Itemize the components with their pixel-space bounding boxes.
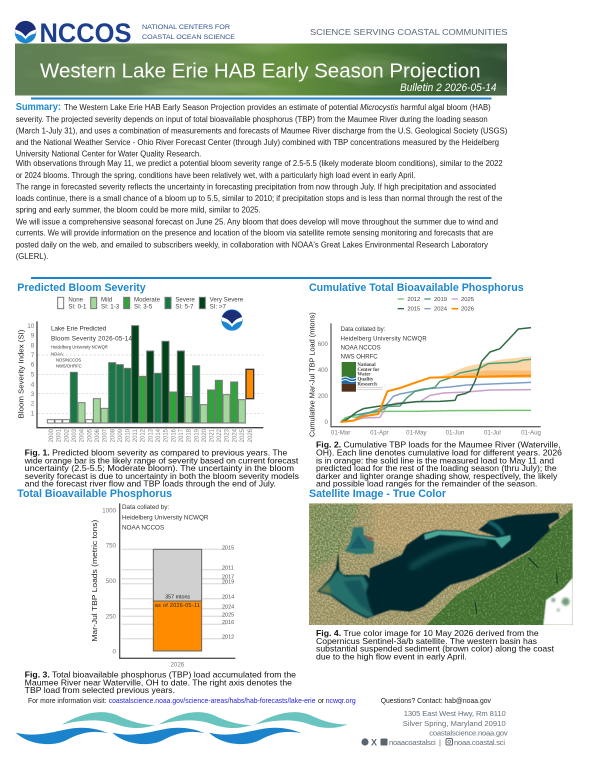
legend: SI: 3-5 bbox=[134, 304, 153, 311]
year labels: 2019 bbox=[222, 580, 234, 586]
bars bbox=[47, 326, 254, 423]
year labels: 2020 bbox=[202, 428, 208, 442]
year labels: 2004 bbox=[80, 428, 86, 442]
load lines bbox=[341, 328, 531, 422]
year labels: 2010 bbox=[126, 428, 132, 442]
caption: figure 3: TBP load from selected previous years. bbox=[25, 686, 175, 695]
summary text: currents. We will provide information on the presence and location of the bloom via satellite remote sensing monitoring and forecasts that are bbox=[16, 229, 494, 238]
summary text: (March 1-July 31), and uses a combination of measurements and forecasts of Maumee River discharge from the U.S. Geological Society (USGS) bbox=[16, 126, 508, 135]
caption: figure 2: predicted load for the rest of the loading season (thru July); the bbox=[316, 464, 557, 473]
NCCOS wordmark: NCCOS bbox=[40, 18, 132, 48]
caption: figure 4: Fig. 4. True color image for 10 May 2026 derived from the bbox=[316, 629, 539, 638]
caption: figure 2: darker and lighter orange shading show, respectively, the likely bbox=[316, 472, 558, 481]
summary text: spring and early summer, the bloom could be more mild, similar to 2025. bbox=[16, 206, 261, 215]
year labels: 2016 bbox=[171, 428, 177, 442]
data credits: NOAA NCCOS bbox=[122, 525, 164, 532]
axis labels: 0 bbox=[325, 419, 329, 426]
organisation name: COASTAL OCEAN SCIENCE bbox=[142, 34, 236, 41]
summary text: Summary: bbox=[16, 102, 61, 113]
caption: figure 1 bbox=[24, 449, 299, 489]
axis labels: 01-Jul bbox=[484, 430, 501, 437]
caption: figure 4 bbox=[316, 629, 555, 661]
summary text: severity. The projected severity depends on input of total bioavailable phosphorus (TBP) from the Maumee River during the loading season bbox=[16, 115, 488, 124]
axis labels: 01-Mar bbox=[331, 430, 350, 437]
caption: figure 4: substantial suspended sediment (brown color) along the coast bbox=[316, 645, 555, 654]
year labels: 2007 bbox=[103, 428, 109, 442]
caption: figure 3 bbox=[25, 671, 297, 695]
more information line bbox=[28, 697, 356, 705]
y axis labels bbox=[27, 323, 35, 418]
year labels: 2021 bbox=[209, 428, 215, 442]
data credits: Data collated by: bbox=[341, 327, 386, 333]
icon: water quality research logo: Quality bbox=[357, 377, 374, 382]
bar chart: bloom severity bbox=[18, 297, 263, 442]
chart annotation: Heidelberg University NCWQR bbox=[51, 344, 108, 349]
year labels: 2002 bbox=[64, 428, 70, 442]
chart annotation: Bloom Severity 2026-05-14 bbox=[51, 335, 132, 342]
legend: None bbox=[68, 297, 84, 304]
address block: noaa.coastal.sci bbox=[454, 738, 505, 747]
bar labels bbox=[155, 594, 200, 609]
y axis title: Mar-Jul TBP Loads (metric tons) bbox=[90, 519, 99, 642]
year labels bbox=[222, 545, 234, 640]
legend: Moderate bbox=[134, 297, 161, 304]
year labels: 2019 bbox=[194, 428, 200, 442]
address block: | bbox=[439, 738, 441, 747]
year labels: 2009 bbox=[118, 428, 124, 442]
data credits: Heidelberg University NCWQR bbox=[122, 514, 209, 521]
axis labels bbox=[102, 507, 185, 669]
y axis labels: 6 bbox=[31, 362, 35, 369]
year labels: 2025 bbox=[240, 428, 246, 442]
axis labels: 01-May bbox=[406, 430, 428, 437]
summary text: and the National Weather Service - Ohio River Forecast Center (through July) combined with TBP concentrations measured by the Heidelberg bbox=[16, 138, 499, 147]
icon: water quality research logo: National bbox=[357, 363, 376, 368]
year labels: 2006 bbox=[95, 428, 101, 442]
address block: Silver Spring, Maryland 20910 bbox=[403, 719, 506, 728]
heading: cumulative TBP: Cumulative Total Bioavailable Phosphorus bbox=[309, 282, 524, 294]
legend: 2012 bbox=[407, 297, 420, 303]
axis labels: 0 bbox=[113, 649, 117, 656]
year labels: 2024 bbox=[232, 428, 238, 442]
caption: figure 1: severity forecast is due to uncertainty in both the bloom severity models bbox=[25, 472, 299, 481]
stacked bar chart: total TBP bbox=[90, 503, 235, 669]
year labels: 2001 bbox=[57, 428, 63, 442]
summary text: The Western Lake Erie HAB Early Season Projection provides an estimate of potential Microcystis harmful algal bloom (HAB) bbox=[64, 103, 491, 112]
summary text: University National Center for Water Quality Research. bbox=[16, 150, 201, 159]
icon: water quality research logo: Research bbox=[357, 382, 377, 387]
summary text: The range in forecasted severity reflects the uncertainty in forecasting precipitation from now through July. If high precipitation and associated bbox=[16, 182, 496, 191]
caption: figure 1: wide orange bar is the likely range of severity based on current forecast bbox=[24, 457, 299, 466]
address block bbox=[389, 709, 508, 747]
icon: water quality research logo: Center for bbox=[357, 368, 380, 373]
more information line: or bbox=[318, 697, 325, 705]
chart annotation: NOAA: bbox=[51, 351, 64, 356]
bulletin date: Bulletin 2 2026-05-14 bbox=[400, 82, 497, 94]
inland lakes bbox=[475, 558, 557, 613]
data credits bbox=[122, 504, 209, 532]
year labels: 2014 bbox=[222, 595, 234, 601]
bar labels: as of 2026-05-11 bbox=[155, 603, 200, 609]
axis labels: 200 bbox=[318, 393, 329, 400]
axis labels: 01-Apr bbox=[370, 430, 389, 437]
clouds bbox=[543, 578, 573, 625]
icon: water quality research logo bbox=[342, 362, 383, 392]
social icons bbox=[361, 738, 452, 748]
caption: figure 2: is in orange: the solid line is the measured load to May 11 and bbox=[316, 457, 554, 466]
satellite image: Lake Erie true color bbox=[309, 503, 573, 625]
chart annotation: NOS/NCCOS bbox=[56, 357, 81, 362]
year labels: 2025 bbox=[222, 612, 234, 618]
y axis labels: 1 bbox=[31, 411, 35, 418]
line chart: cumulative TBP bbox=[310, 297, 541, 437]
caption: figure 2: and possible load ranges for the remainder of the season. bbox=[316, 480, 537, 489]
more information line: coastalscience.noaa.gov/science-areas/habs/hab-forecasts/lake-erie bbox=[109, 697, 316, 705]
header logo: NOAA emblem bbox=[15, 21, 36, 43]
year labels: 2023 bbox=[225, 428, 231, 442]
legend: 2025 bbox=[461, 297, 474, 303]
footer waves bbox=[16, 712, 348, 744]
year labels: 2017 bbox=[179, 428, 185, 442]
legend: 2026 bbox=[461, 307, 474, 313]
axis labels: 250 bbox=[106, 613, 117, 620]
y axis labels: 8 bbox=[31, 342, 35, 349]
data credits: NOAA NCCOS bbox=[341, 346, 381, 352]
chart annotation bbox=[51, 326, 132, 369]
orange range shading bbox=[438, 356, 531, 378]
legend: 2024 bbox=[434, 307, 448, 313]
address block: 1305 East West Hwy, Rm 8110 bbox=[404, 709, 506, 718]
axis labels: 01-Aug bbox=[521, 430, 541, 437]
summary text: (GLERL). bbox=[16, 252, 48, 261]
caption: figure 2: Fig. 2. Cumulative TBP loads for the Maumee River (Waterville, bbox=[316, 441, 561, 450]
data credits: Data collated by: bbox=[122, 504, 169, 511]
year labels: 2015 bbox=[164, 428, 170, 442]
heading: satellite image: Satellite Image - True Color bbox=[309, 488, 446, 500]
more information line: ncwqr.org bbox=[326, 697, 356, 705]
year labels: 2016 bbox=[222, 620, 234, 626]
address block: noaacoastalsci bbox=[389, 738, 436, 747]
orange load bar bbox=[153, 601, 202, 651]
data credits: Heidelberg University NCWQR bbox=[341, 336, 427, 342]
address block: coastalscience.noaa.gov bbox=[429, 728, 508, 738]
heading: total bioavailable phosphorus: Total Bioavailable Phosphorus bbox=[17, 488, 172, 500]
y axis labels: 10 bbox=[27, 323, 35, 330]
legend: Very Severe bbox=[210, 297, 244, 304]
summary text: We will issue a comprehensive seasonal forecast on June 25. Any bloom that does develop will move throughout the summer due to wind and bbox=[16, 217, 498, 226]
y axis title: Cumulative Mar-Jul TBP Load (mtons) bbox=[310, 312, 317, 437]
organisation name: NATIONAL CENTERS FOR bbox=[142, 24, 230, 31]
year labels: 2011 bbox=[222, 566, 234, 572]
axis labels: 400 bbox=[318, 367, 329, 374]
year labels: 2011 bbox=[133, 429, 139, 442]
year labels: 2000 bbox=[49, 428, 55, 442]
western basin sediment bbox=[319, 570, 374, 617]
year labels: 2005 bbox=[87, 428, 93, 442]
lake body bbox=[317, 513, 559, 618]
y axis labels: 7 bbox=[31, 352, 35, 359]
year labels: 2003 bbox=[72, 428, 78, 442]
legend: SI: 5-7 bbox=[175, 304, 194, 311]
title banner bbox=[15, 44, 507, 96]
axis labels: 750 bbox=[106, 543, 117, 550]
chart annotation: Lake Erie Predicted bbox=[51, 326, 107, 333]
y axis labels: 4 bbox=[31, 381, 35, 388]
legend: 2015 bbox=[407, 307, 420, 313]
chart annotation: NWS/OHRFC bbox=[56, 364, 82, 369]
year labels: 2024 bbox=[222, 604, 234, 610]
y axis title: Bloom Severity Index (SI) bbox=[18, 330, 25, 418]
social icons: X bbox=[371, 738, 377, 748]
year labels: 2015 bbox=[222, 545, 234, 551]
year labels: 2012 bbox=[222, 634, 234, 640]
year labels: 2022 bbox=[217, 428, 223, 442]
organisation name bbox=[142, 24, 236, 41]
legend: SI: >7 bbox=[210, 304, 226, 311]
y axis labels: 9 bbox=[31, 333, 35, 340]
title: Western Lake Erie HAB Early Season Projection bbox=[40, 60, 480, 82]
Lake St Clair bbox=[345, 527, 374, 554]
legend bbox=[58, 297, 244, 311]
icon: NOAA logo bbox=[221, 309, 243, 331]
legend: SI: 1-3 bbox=[101, 304, 120, 311]
summary text: posted daily on the web, and emailed to subscribers weekly, in collaboration with NOAA's Great Lakes Environmental Research Laboratory bbox=[16, 240, 488, 249]
summary text: or 2024 blooms. Through the spring, conditions have been relatively wet, with a particularly high load event in early April. bbox=[16, 171, 415, 180]
axis labels: 500 bbox=[106, 578, 117, 585]
y axis labels: 3 bbox=[31, 391, 35, 398]
caption: figure 1: uncertainty (2.5-5.5; Moderate bloom). The uncertainty in the bloom bbox=[25, 464, 294, 473]
axis labels bbox=[318, 341, 541, 437]
year labels: 2012 bbox=[141, 428, 147, 442]
legend bbox=[398, 297, 474, 313]
caption: figure 1: Fig. 1. Predicted bloom severity as compared to previous years. The bbox=[25, 449, 288, 458]
tagline: SCIENCE SERVING COASTAL COMMUNITIES bbox=[310, 27, 508, 37]
data credits bbox=[341, 327, 427, 361]
legend: SI: 0-1 bbox=[68, 304, 87, 311]
axis labels: 01-Jun bbox=[446, 430, 465, 437]
y axis labels: 2 bbox=[31, 401, 35, 408]
data credits: NWS OHRFC bbox=[341, 355, 378, 361]
selected year reference lines bbox=[122, 549, 227, 639]
more information line: For more information visit: bbox=[28, 697, 107, 705]
year labels: 2014 bbox=[156, 428, 162, 442]
summary text: loads continue, there is a small chance of a bloom up to 5.5, similar to 2010; if precipitation stops and is less than normal through the rest of the bbox=[16, 194, 503, 203]
y axis labels: 5 bbox=[31, 372, 35, 379]
year labels bbox=[49, 428, 254, 442]
grey range bar bbox=[153, 549, 202, 601]
year labels: 2013 bbox=[148, 428, 154, 442]
axes bbox=[331, 323, 541, 427]
coastal sediment plume bbox=[424, 531, 511, 548]
caption: figure 2: OH). Each line denotes cumulative load for different years. 2026 bbox=[316, 449, 563, 458]
caption: figure 3: Maumee River near Waterville, OH to date. The right axis denotes the bbox=[25, 678, 293, 687]
legend: 2019 bbox=[434, 297, 447, 303]
legend: Mild bbox=[101, 297, 113, 304]
axis labels: 600 bbox=[318, 341, 329, 348]
year labels: 2018 bbox=[187, 428, 193, 442]
contact: Questions? Contact: hab@noaa.gov bbox=[381, 697, 491, 705]
icon: water quality research logo: Water bbox=[357, 373, 371, 378]
caption: figure 4: due to the high flow event in early April. bbox=[316, 652, 467, 661]
axis labels: 1000 bbox=[102, 507, 117, 514]
caption: figure 3: Fig. 3. Total bioavailable phosphorus (TBP) load accumulated from the bbox=[25, 671, 297, 680]
summary text bbox=[16, 102, 508, 261]
heading: predicted bloom severity: Predicted Bloom Severity bbox=[17, 282, 146, 294]
year labels: 2017 bbox=[222, 574, 234, 580]
caption: figure 2 bbox=[316, 441, 563, 489]
legend: Severe bbox=[175, 297, 195, 304]
bar labels: 357 mtons bbox=[165, 594, 190, 600]
year labels: 2026 bbox=[248, 428, 254, 442]
summary text: With observations through May 11, we predict a potential bloom severity range of 2.5-5.5 (likely moderate bloom conditions), similar to the 2022 bbox=[16, 159, 503, 168]
axis labels: 2026 bbox=[170, 662, 185, 669]
caption: figure 1: and the forecast river flow and TBP loads through the end of July. bbox=[25, 480, 276, 489]
year labels: 2008 bbox=[110, 428, 116, 442]
caption: figure 4: Copernicus Sentinel-3a/b satellite. The western basin has bbox=[316, 637, 537, 646]
